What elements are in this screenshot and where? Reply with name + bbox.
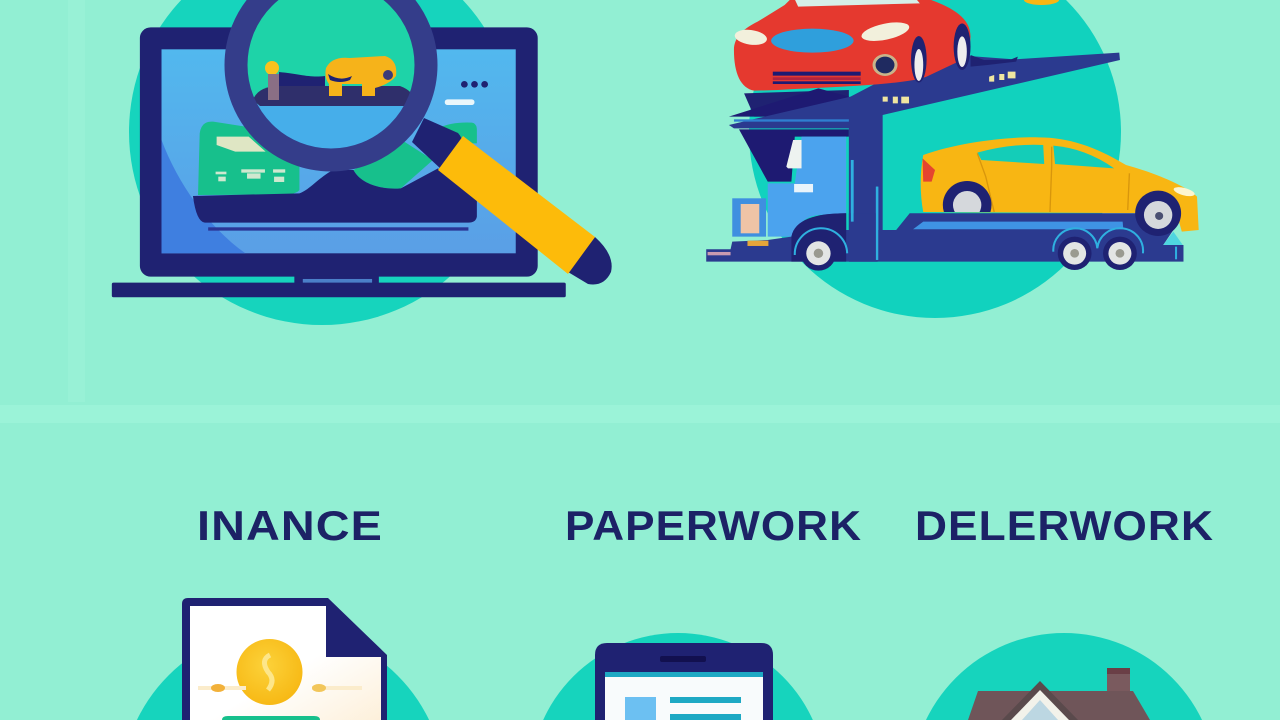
icon: paperwork tablet <box>530 633 826 720</box>
heading: finance: INANCE <box>197 502 383 549</box>
magnifier handle <box>412 118 612 284</box>
heading: paperwork: PAPERWORK <box>565 502 862 549</box>
truck cab <box>732 137 846 237</box>
icon: finance document with coin <box>121 598 445 720</box>
orange coin <box>1024 0 1059 5</box>
red car <box>734 0 971 91</box>
icon: car transporter truck <box>706 0 1199 318</box>
heading: delerwork: DELERWORK <box>915 502 1214 549</box>
upper deck and column <box>729 53 1120 262</box>
icon: laptop with magnifying glass <box>112 0 612 325</box>
magnifier lens <box>236 0 426 164</box>
truck chassis <box>706 160 1183 262</box>
laptop <box>112 27 566 297</box>
truck wheels <box>795 191 1181 271</box>
yellow car <box>921 137 1199 232</box>
icon: house dealership <box>911 633 1217 720</box>
